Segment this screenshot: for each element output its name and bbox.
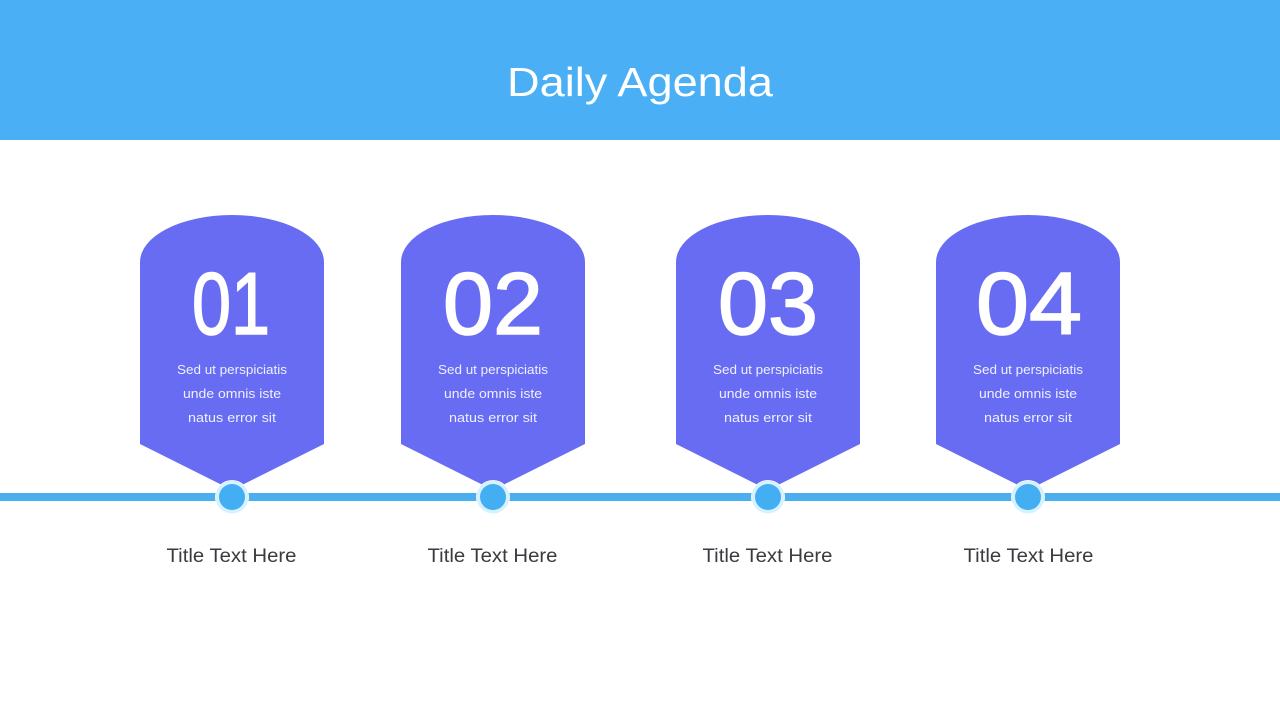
description 03: unde omnis iste: [719, 386, 817, 401]
panel: agenda item 03: [676, 215, 860, 567]
timeline line: [0, 493, 1280, 501]
caption 04: Title Text Here: [964, 546, 1094, 567]
caption 01: Title Text Here: [166, 546, 296, 567]
badge shape 01: [140, 215, 324, 490]
header band: [0, 0, 1280, 140]
caption 02: Title Text Here: [428, 546, 558, 567]
number 01: 01: [192, 254, 270, 353]
description 04: natus error sit: [984, 410, 1072, 425]
description 04: unde omnis iste: [979, 386, 1077, 401]
number 02: 02: [443, 254, 543, 353]
badge shape 03: [676, 215, 860, 490]
number 04: 04: [976, 254, 1082, 353]
description 01: unde omnis iste: [183, 386, 281, 401]
description 01: Sed ut perspiciatis: [177, 362, 288, 377]
description 02: Sed ut perspiciatis: [438, 362, 549, 377]
panel: agenda item 04: [936, 215, 1120, 567]
timeline marker 04: [1011, 480, 1045, 514]
timeline marker 02: [476, 480, 510, 514]
description 01: natus error sit: [188, 410, 276, 425]
badge shape 04: [936, 215, 1120, 490]
description 03: [713, 362, 824, 425]
timeline marker 01: [215, 480, 249, 514]
description 03: natus error sit: [724, 410, 812, 425]
description 04: [973, 362, 1084, 425]
panel: agenda item 02: [401, 215, 585, 567]
description 02: natus error sit: [449, 410, 537, 425]
description 02: unde omnis iste: [444, 386, 542, 401]
timeline marker 03: [751, 480, 785, 514]
caption 03: Title Text Here: [702, 546, 832, 567]
title: Daily Agenda: [507, 59, 773, 105]
number 03: 03: [718, 254, 818, 353]
description 03: Sed ut perspiciatis: [713, 362, 824, 377]
description 01: [177, 362, 288, 425]
badge shape 02: [401, 215, 585, 490]
description 04: Sed ut perspiciatis: [973, 362, 1084, 377]
description 02: [438, 362, 549, 425]
panel: agenda item 01: [140, 215, 324, 567]
